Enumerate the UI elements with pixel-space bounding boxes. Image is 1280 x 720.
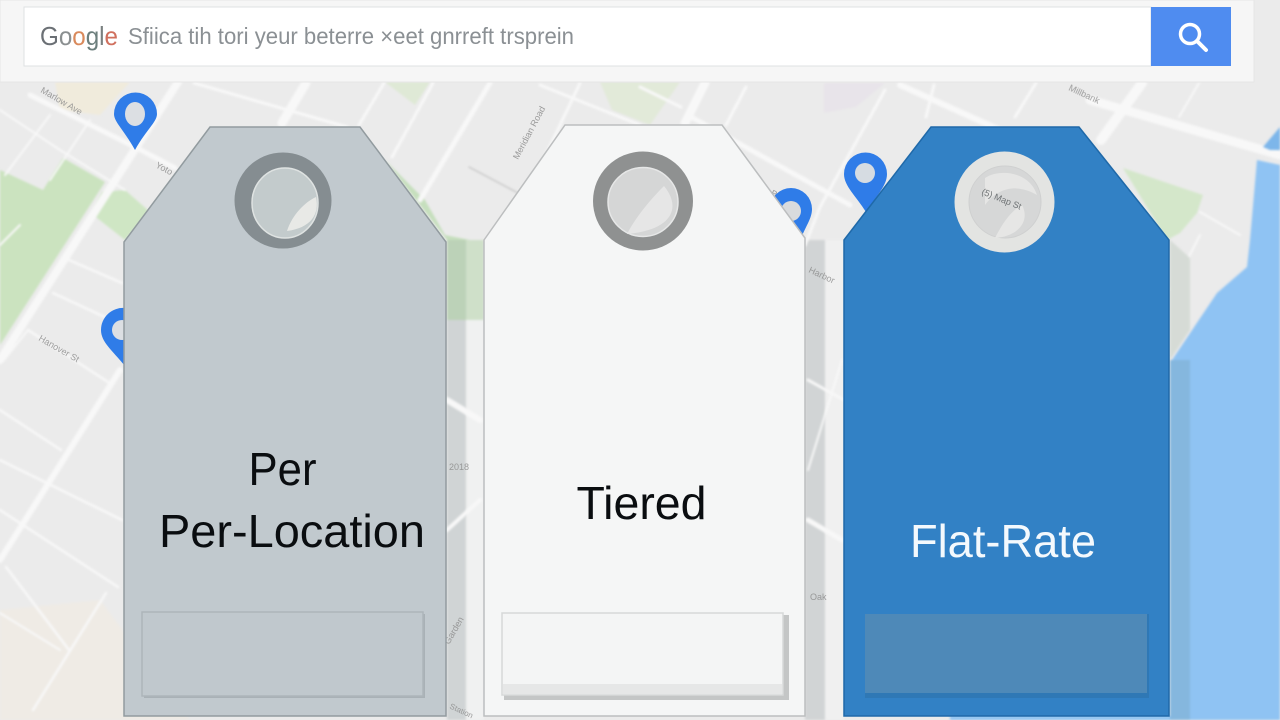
price box xyxy=(502,613,789,700)
water xyxy=(950,127,1280,720)
grommet xyxy=(593,152,693,250)
grommet: (5) Map St xyxy=(980,187,1023,212)
price box xyxy=(142,612,425,698)
map labels: 2018 xyxy=(449,462,469,472)
map labels: Station xyxy=(448,702,475,720)
icon: map pin middle xyxy=(770,188,812,236)
icon: map pin top left xyxy=(114,92,157,150)
map labels: Millbank xyxy=(1067,83,1102,106)
google logo: Google xyxy=(40,21,118,51)
grommet xyxy=(234,152,332,248)
map labels xyxy=(37,83,1187,720)
map labels: Marlow Ave xyxy=(39,85,84,117)
search panel xyxy=(0,0,1254,82)
map labels: Meridian Road xyxy=(511,105,547,161)
search button xyxy=(1151,7,1231,66)
map labels: Yoto xyxy=(154,160,174,177)
map labels: Harbor xyxy=(807,265,836,285)
search placeholder: Sfiica tih tori yeur beterre ×eet gnrreft trsprein xyxy=(128,23,574,49)
map labels: 456 xyxy=(1172,466,1187,476)
map labels: Garden xyxy=(442,615,466,646)
icon: map pin right xyxy=(844,152,887,212)
panel: flat-rate tag xyxy=(844,127,1169,716)
icon: map pin left xyxy=(101,308,132,366)
map labels: Oak xyxy=(810,592,827,602)
map labels: Hanover St xyxy=(37,333,81,364)
tag label: Flat-Rate xyxy=(910,515,1096,567)
price box xyxy=(865,614,1149,698)
tag label xyxy=(159,443,425,557)
map labels: Brook xyxy=(769,188,795,208)
panel: per-location tag xyxy=(124,127,446,716)
tag label: Per xyxy=(248,443,316,495)
grommet xyxy=(954,152,1054,252)
tag label: Tiered xyxy=(576,477,706,529)
search input xyxy=(24,7,1151,66)
tag label: Per-Location xyxy=(159,505,425,557)
panel: tiered tag xyxy=(484,125,805,716)
